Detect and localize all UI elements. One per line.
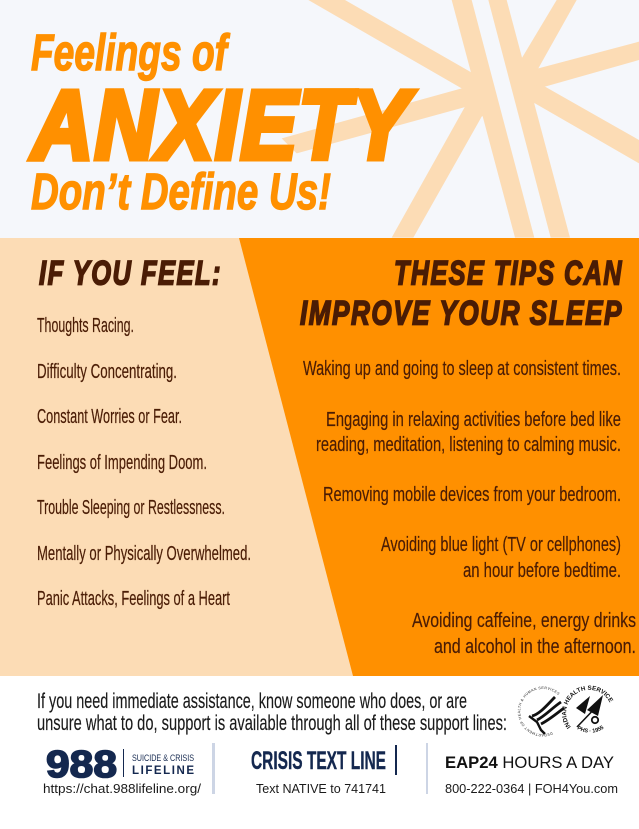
988 lifeline logo: SUICIDE & CRISIS: [132, 753, 194, 763]
tips list: [303, 358, 636, 658]
symptom list: Panic Attacks, Feelings of a Heart: [37, 588, 230, 610]
title: Feelings of: [31, 24, 231, 81]
EAP contact: EAP24 HOURS A DAY: [445, 754, 614, 772]
header background: [0, 0, 639, 238]
title: [30, 24, 415, 220]
988 lifeline logo: [43, 744, 202, 796]
symptom list: Trouble Sleeping or Restlessness.: [37, 497, 225, 519]
symptom list: [37, 315, 251, 610]
symptom list: Constant Worries or Fear.: [37, 406, 182, 428]
title: Don’t Define Us!: [31, 163, 331, 220]
icon: Indian Health Service seal: PHS · 1955: [577, 725, 604, 733]
starburst rays: [282, 0, 639, 238]
EAP contact: [445, 754, 618, 796]
footer background: [0, 676, 639, 829]
support text: [37, 690, 507, 735]
icon: Indian Health Service seal: INDIAN HEALTH SERVICE: [562, 686, 614, 730]
symptom list: Feelings of Impending Doom.: [37, 452, 207, 474]
symptom list: Mentally or Physically Overwhelmed.: [37, 543, 251, 565]
icon: HHS seal: DEPARTMENT OF HEALTH & HUMAN SERVICES USA: [518, 686, 560, 736]
crisis text line logo: CRISIS TEXT LINE: [251, 747, 386, 775]
panel: if you feel: [0, 238, 360, 676]
crisis text line logo: [251, 745, 397, 796]
heading: if you feel: IF YOU FEEL:: [39, 254, 222, 292]
EAP phone and website: 800-222-0364 | FOH4You.com: [445, 782, 618, 796]
icon: HHS seal: [518, 686, 565, 736]
panel: sleep tips: [239, 238, 639, 676]
988 lifeline logo: LIFELINE: [132, 765, 194, 777]
title: ANXIETY: [30, 70, 415, 180]
heading: sleep tips: [300, 254, 623, 332]
symptom list: Difficulty Concentrating.: [37, 361, 177, 383]
988 url: https://chat.988lifeline.org/: [43, 782, 202, 796]
symptom list: Thoughts Racing.: [37, 315, 134, 337]
988 lifeline logo: 988: [46, 744, 117, 786]
crisis text instruction: Text NATIVE to 741741: [256, 782, 386, 796]
